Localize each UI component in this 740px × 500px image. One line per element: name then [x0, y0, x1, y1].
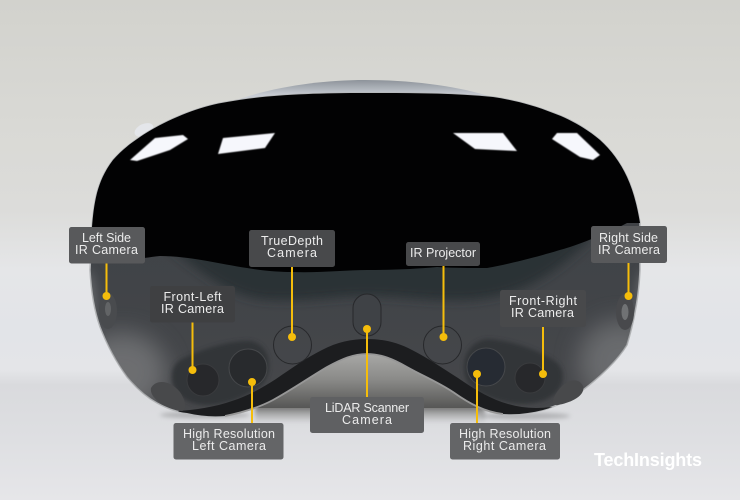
- label: front-left IR camera: Front-Left: [164, 290, 222, 304]
- label: right side IR camera: IR Camera: [598, 243, 660, 257]
- label: high resolution right camera: Right Camera: [463, 439, 546, 453]
- front-right IR lens: [515, 363, 545, 393]
- left side IR camera lens: [99, 293, 117, 329]
- leader: IR projector: [440, 266, 448, 341]
- logo: TechInsights: TechInsights: [594, 450, 702, 470]
- leader: TrueDepth camera: [288, 267, 296, 341]
- TrueDepth camera window: [274, 326, 312, 364]
- leader: left side IR camera: [102, 263, 110, 300]
- label: TrueDepth camera: TrueDepth: [261, 234, 323, 248]
- lower glass: [90, 93, 640, 416]
- right side IR camera lens: [616, 294, 634, 330]
- label: high resolution right camera: [450, 423, 560, 460]
- black visor: [92, 93, 640, 272]
- leader: front-left IR camera: [188, 322, 196, 374]
- high resolution right lens: [467, 348, 505, 386]
- nose bridge: [255, 345, 485, 408]
- camera housing left: [172, 341, 269, 405]
- leader: front-right IR camera: [539, 327, 547, 378]
- label: right side IR camera: [591, 226, 667, 263]
- label: IR projector: IR Projector: [410, 246, 476, 260]
- camera housing right: [464, 339, 563, 404]
- label: TrueDepth camera: [249, 230, 335, 267]
- label: left side IR camera: Left Side: [82, 231, 131, 245]
- label: LiDAR scanner camera: Camera: [342, 413, 392, 427]
- high resolution left lens: [229, 349, 267, 387]
- leader: right side IR camera: [624, 263, 632, 300]
- IR projector window: [424, 326, 462, 364]
- label: front-left IR camera: [150, 286, 235, 322]
- label: left side IR camera: IR Camera: [75, 243, 138, 257]
- left bottom bump: [151, 382, 185, 411]
- right bottom bump: [553, 380, 583, 405]
- label: front-left IR camera: IR Camera: [161, 302, 224, 316]
- label: high resolution right camera: High Resolution: [459, 427, 551, 441]
- front-left IR lens: [187, 364, 219, 396]
- label: high resolution left camera: Left Camera: [192, 439, 266, 453]
- label: IR projector: [406, 242, 480, 266]
- lower dark band: [178, 339, 552, 420]
- reflections: [130, 133, 600, 161]
- label: left side IR camera: [69, 227, 145, 264]
- floor shadow: [160, 404, 570, 424]
- leader: high resolution right camera: [473, 370, 481, 423]
- right camera lenses: [467, 348, 583, 405]
- label: TrueDepth camera: Camera: [267, 246, 317, 260]
- headset shell: [76, 93, 662, 420]
- leader: LiDAR scanner camera: [363, 325, 371, 397]
- label: LiDAR scanner camera: [310, 397, 424, 433]
- side band: [132, 120, 156, 140]
- mid-tone dark reflection: [179, 240, 590, 302]
- label: high resolution left camera: High Resolution: [183, 427, 275, 441]
- top head strap: [228, 80, 497, 110]
- left camera lenses: [151, 349, 267, 411]
- nose rim highlight: [225, 354, 503, 416]
- label: front-right IR camera: IR Camera: [511, 306, 574, 320]
- label: front-right IR camera: Front-Right: [509, 294, 578, 308]
- label: high resolution left camera: [174, 423, 284, 460]
- LiDAR scanner window: [353, 294, 381, 336]
- label: front-right IR camera: [500, 290, 586, 327]
- glass edge tone: [76, 200, 662, 420]
- label: LiDAR scanner camera: LiDAR Scanner: [325, 401, 409, 415]
- leader: high resolution left camera: [248, 378, 256, 423]
- label: right side IR camera: Right Side: [599, 231, 658, 245]
